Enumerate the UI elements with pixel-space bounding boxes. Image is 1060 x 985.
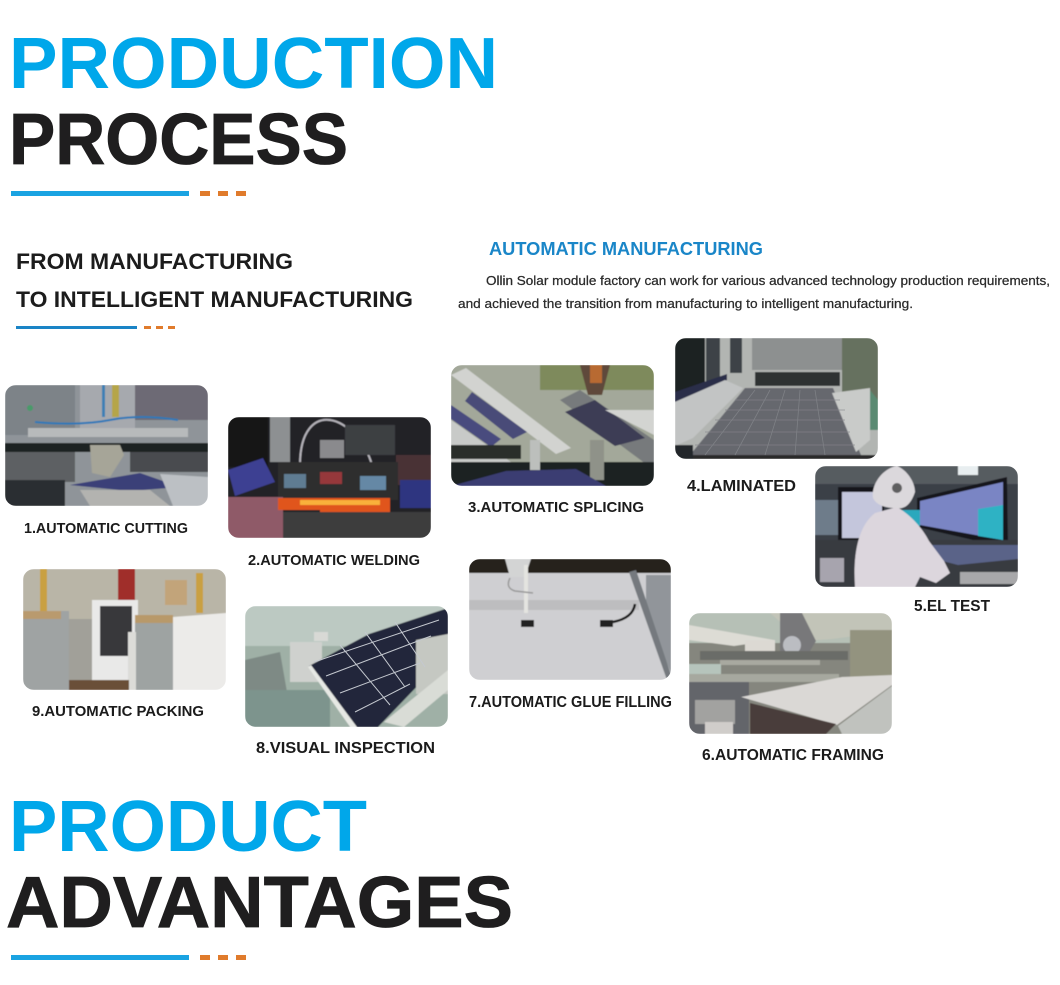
subheading: from manufacturing to intelligent manufacturing: FROM MANUFACTURING (16, 249, 293, 274)
step labels (24, 478, 990, 764)
photo 3: automatic splicing (451, 365, 654, 486)
title: production process: PRODUCTION (9, 24, 498, 104)
step labels: 6.AUTOMATIC FRAMING (702, 747, 884, 764)
title: product advantages: ADVANTAGES (6, 863, 513, 943)
step labels: 5.EL TEST (914, 598, 990, 615)
photo 9: automatic packing (23, 569, 226, 690)
photo 2: automatic welding (228, 417, 431, 538)
photo 5: el test (815, 466, 1018, 587)
photo 8: visual inspection (245, 606, 448, 727)
title: product advantages (6, 787, 513, 943)
photo 6: automatic framing (689, 613, 892, 734)
title: production process: PROCESS (9, 100, 348, 180)
step labels: 9.AUTOMATIC PACKING (32, 704, 204, 720)
step labels: 1.AUTOMATIC CUTTING (24, 521, 188, 537)
step labels: 4.LAMINATED (687, 478, 796, 495)
description text: Ollin Solar module factory can work for various advanced technology production requirements, (486, 273, 1050, 288)
step labels: 2.AUTOMATIC WELDING (248, 553, 420, 569)
heading: automatic manufacturing: AUTOMATIC MANUFACTURING (489, 239, 763, 259)
bottom underline accent (11, 955, 246, 960)
step labels: 3.AUTOMATIC SPLICING (468, 500, 644, 516)
photo 4: laminated (675, 338, 878, 459)
description text: and achieved the transition from manufacturing to intelligent manufacturing. (458, 296, 913, 311)
photo 1: automatic cutting (5, 385, 208, 506)
subheading: from manufacturing to intelligent manufacturing: TO INTELLIGENT MANUFACTURING (16, 287, 413, 312)
title underline accent (11, 191, 246, 196)
description text (458, 273, 1050, 311)
step labels: 8.VISUAL INSPECTION (256, 740, 435, 757)
title: product advantages: PRODUCT (9, 787, 367, 867)
photo 7: automatic glue filling (469, 559, 671, 680)
step labels: 7.AUTOMATIC GLUE FILLING (469, 694, 672, 711)
title: production process (9, 24, 498, 180)
subheading underline accent (16, 326, 175, 329)
subheading: from manufacturing to intelligent manufacturing (16, 249, 413, 312)
